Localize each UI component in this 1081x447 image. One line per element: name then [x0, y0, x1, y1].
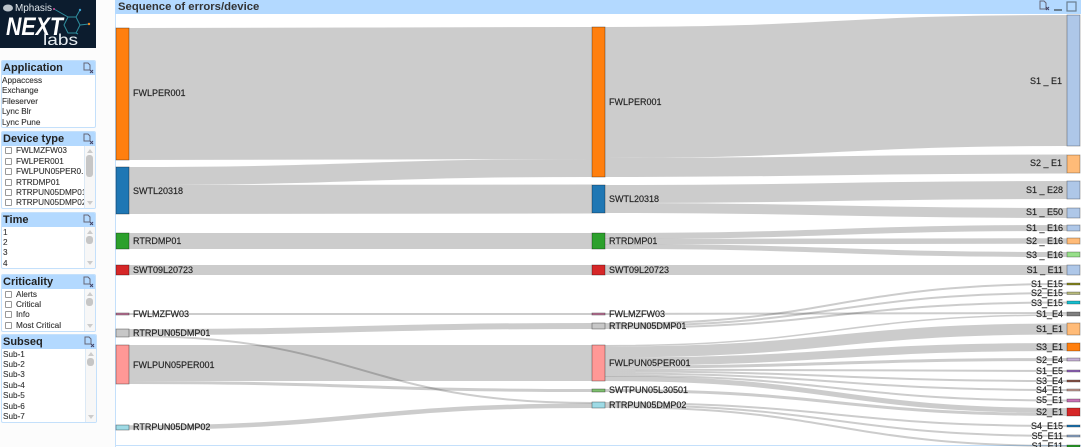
labels: second stage: FWLPER001	[609, 97, 662, 107]
labels: second stage: FWLMZFW03	[609, 309, 665, 319]
heading: Device type	[2, 132, 95, 146]
labels: third stage: S2_E15	[1031, 288, 1063, 298]
panel: Time filter: 3	[3, 248, 8, 257]
labels: third stage: S2 _ E16	[1026, 236, 1063, 246]
panel: Subseq filter	[1, 334, 97, 423]
labels: third stage: S3 _ E16	[1026, 250, 1063, 260]
labels: first stage: RTRPUN05DMP02	[133, 422, 210, 432]
panel: Time filter: 1	[3, 228, 8, 237]
heading: Sequence of errors/device: Sequence of errors/device	[118, 1, 259, 13]
labels: third stage: S1 _ E11	[1027, 265, 1063, 275]
labels: third stage: S1 _ E50	[1026, 207, 1063, 217]
labels: first stage: RTRPUN05DMP01	[133, 328, 210, 338]
labels: second stage	[609, 97, 691, 410]
labels: second stage: SWTPUN05L30501	[609, 385, 688, 395]
logo: Mphasis NEXT labs	[0, 0, 96, 48]
labels: second stage: RTRPUN05DMP01	[609, 321, 686, 331]
logo: Mphasis NEXT labs: NEXT	[6, 13, 65, 41]
panel: Criticality filter: Most Critical	[16, 321, 61, 330]
panel: Device type filter: RTRPUN05DMP02	[16, 198, 86, 207]
panel: Subseq filter: Sub-4	[3, 381, 25, 390]
labels: second stage: SWTL20318	[609, 194, 659, 204]
panel: Criticality filter: Info	[16, 310, 30, 319]
panel: Device type filter: FWLPER001	[16, 157, 64, 166]
labels: third stage: S5_E1	[1036, 395, 1063, 405]
labels: third stage: S2 _ E1	[1030, 158, 1062, 168]
icons: clear, minimise, maximise	[1040, 0, 1077, 12]
panel: Device type filter	[1, 131, 96, 209]
labels: first stage: SWT09L20723	[133, 265, 193, 275]
heading: Sequence of errors/device	[115, 0, 1081, 14]
labels: third stage: S2_E4	[1036, 355, 1063, 365]
labels: third stage: S1_E4	[1036, 309, 1063, 319]
labels: third stage: S1_E1	[1036, 324, 1063, 334]
panel: Subseq filter: Sub-2	[3, 360, 25, 369]
panel: Device type filter: RTRPUN05DMP01	[16, 188, 86, 197]
panel: Application filter: Fileserver	[2, 97, 38, 106]
panel: Time filter: 2	[3, 238, 8, 247]
labels: second stage: RTRPUN05DMP02	[609, 400, 686, 410]
labels: third stage: S1_E15	[1031, 279, 1063, 289]
panel: Application filter: Exchange	[2, 86, 38, 95]
labels: third stage: S1 _ E16	[1026, 223, 1063, 233]
labels: first stage: FWLMZFW03	[133, 309, 189, 319]
labels: third stage: S4_E15	[1031, 421, 1063, 431]
panel: Device type filter: FWLPUN05PER0...	[16, 167, 88, 176]
labels: first stage	[133, 88, 215, 432]
heading: Time: Time	[3, 214, 28, 226]
labels: third stage: S1 _ E1	[1030, 76, 1062, 86]
panel: Time filter: 4	[3, 259, 8, 268]
labels: third stage: S1_E5	[1036, 366, 1063, 376]
panel: Subseq filter: Sub-7	[3, 412, 25, 421]
panel: Subseq filter: Sub-1	[3, 350, 25, 359]
panel: Device type filter: FWLMZFW03	[16, 146, 67, 155]
labels: first stage: FWLPER001	[133, 88, 186, 98]
labels: third stage: S3_E15	[1031, 298, 1063, 308]
panel: Application filter: Lync Pune	[2, 118, 40, 127]
labels: third stage: S5_E11	[1032, 431, 1063, 441]
panel: Criticality filter: Alerts	[16, 290, 37, 299]
labels: first stage: SWTL20318	[133, 186, 183, 196]
labels: second stage: SWT09L20723	[609, 265, 669, 275]
labels: second stage: RTRDMP01	[609, 236, 657, 246]
panel: Device type filter: RTRDMP01	[16, 178, 60, 187]
labels: first stage: FWLPUN05PER001	[133, 360, 215, 370]
panel: Time filter	[1, 212, 96, 269]
panel: Application filter	[1, 60, 96, 128]
heading: Application	[2, 61, 95, 75]
panel: Subseq filter: Sub-6	[3, 402, 25, 411]
heading: Device type: Device type	[3, 133, 64, 145]
labels: third stage: S3_E4	[1036, 376, 1063, 386]
panel: Criticality filter: Critical	[16, 300, 41, 309]
heading: Subseq	[2, 335, 96, 349]
logo: Mphasis NEXT labs: Mphasis	[15, 2, 52, 14]
labels: first stage: RTRDMP01	[133, 236, 181, 246]
labels: third stage: S2_E1	[1036, 407, 1063, 417]
nodes: third stage	[1067, 15, 1080, 447]
panel: Application filter: Lync Blr	[2, 107, 31, 116]
links: first to second stage	[129, 93, 592, 428]
labels: second stage: FWLPUN05PER001	[609, 358, 691, 368]
links: second to third stage	[605, 80, 1067, 446]
panel: Subseq filter: Sub-3	[3, 370, 25, 379]
labels: third stage	[1026, 76, 1063, 447]
nodes: first stage	[116, 28, 129, 430]
heading: Criticality	[2, 275, 95, 289]
nodes: second stage	[592, 27, 605, 408]
heading: Subseq: Subseq	[3, 336, 43, 348]
labels: third stage: S4_E1	[1036, 385, 1063, 395]
labels: third stage: S3_E1	[1036, 342, 1063, 352]
panel: Subseq filter: Sub-5	[3, 391, 25, 400]
panel: Criticality filter	[1, 274, 96, 332]
heading: Application: Application	[3, 62, 63, 74]
labels: third stage: S1 _ E28	[1026, 185, 1063, 195]
heading: Time	[2, 213, 95, 227]
heading: Criticality: Criticality	[3, 276, 53, 288]
panel: Application filter: Appaccess	[2, 76, 42, 85]
